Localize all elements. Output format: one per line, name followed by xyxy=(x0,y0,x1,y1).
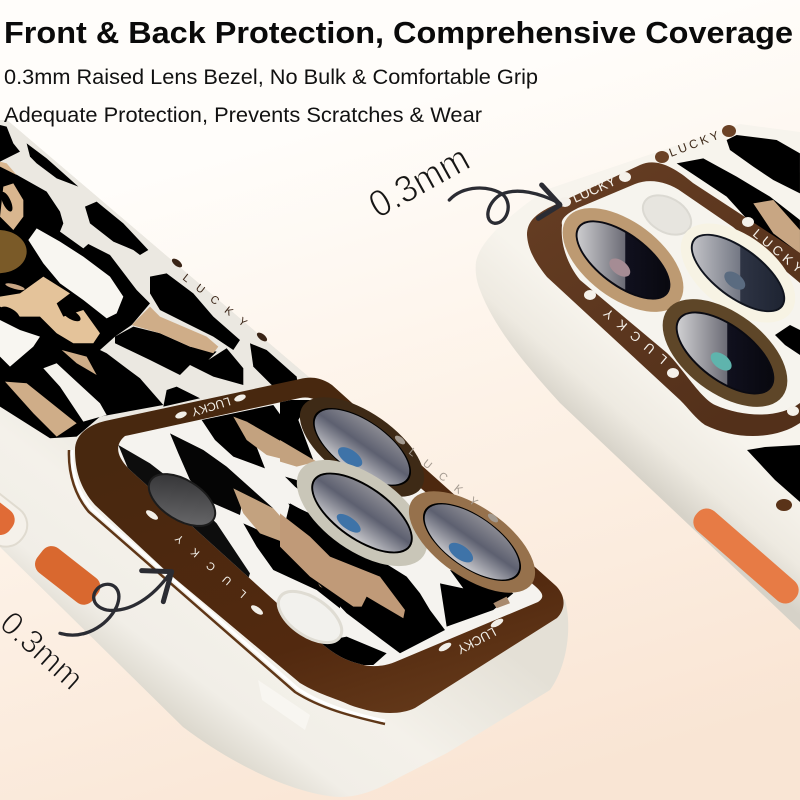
case edge label LUCKY: LUCKY xyxy=(180,272,250,330)
subtitle line 1: 0.3mm Raised Lens Bezel, No Bulk & Comfortable Grip xyxy=(4,66,538,89)
annotation: right 0.3mm: 0.3mm xyxy=(362,138,477,227)
bezel label: top LUCKY xyxy=(174,393,247,420)
bezel label: right LUCKY xyxy=(393,434,500,524)
right case leopard print xyxy=(677,135,800,608)
bezel label: left LUCKY: LUCKY xyxy=(600,305,670,367)
lens: silver ring xyxy=(279,439,445,587)
left flash xyxy=(270,581,350,653)
lens: tan ring xyxy=(544,188,702,332)
black print lower right xyxy=(747,445,800,502)
subtitle line 2: Adequate Protection, Prevents Scratches & Wear xyxy=(4,104,482,127)
white rim line xyxy=(72,450,385,721)
bezel label: left LUCKY xyxy=(145,509,264,616)
lens bezel xyxy=(527,162,800,436)
lens: dark brown ring xyxy=(643,278,800,428)
brown heart xyxy=(776,499,792,511)
left case leopard print xyxy=(0,120,330,440)
lens: tan ring xyxy=(392,471,552,613)
thin brown rim line xyxy=(69,450,385,724)
case edge label LUCKY xyxy=(170,257,269,343)
orange side button xyxy=(693,508,799,604)
bezel label: top LUCKY: LUCKY xyxy=(570,172,619,206)
left phone case xyxy=(0,120,568,797)
body highlight xyxy=(258,680,310,730)
bezel label: top LUCKY: LUCKY xyxy=(190,394,232,419)
lens: cream ring xyxy=(663,204,800,342)
camera window xyxy=(118,398,542,666)
bezel label: left LUCKY: LUCKY xyxy=(173,531,249,600)
side button halo xyxy=(0,477,35,555)
bezel label: left LUCKY xyxy=(584,290,799,416)
bezel label: top LUCKY xyxy=(559,172,631,207)
bezel label: bottom LUCKY xyxy=(437,617,505,657)
edge label LUCKY xyxy=(655,125,736,163)
orange side button (lower) xyxy=(31,542,105,609)
edge label LUCKY: LUCKY xyxy=(667,128,721,160)
right phone case xyxy=(476,124,800,630)
left case body xyxy=(0,120,568,797)
title: Front & Back Protection, Comprehensive Coverage xyxy=(4,15,793,50)
flash xyxy=(636,187,698,243)
lens: dark brown ring xyxy=(284,378,440,516)
lens bezel xyxy=(75,378,564,713)
bezel label: bottom LUCKY: LUCKY xyxy=(454,624,499,657)
right case body xyxy=(476,124,800,630)
annotation: left arrow xyxy=(60,571,172,635)
camera window xyxy=(562,181,800,414)
bezel label: right LUCKY: LUCKY xyxy=(406,446,480,509)
annotation: right arrow xyxy=(449,185,560,223)
orange side button (upper) xyxy=(0,488,20,540)
left black camera lens xyxy=(140,463,224,537)
